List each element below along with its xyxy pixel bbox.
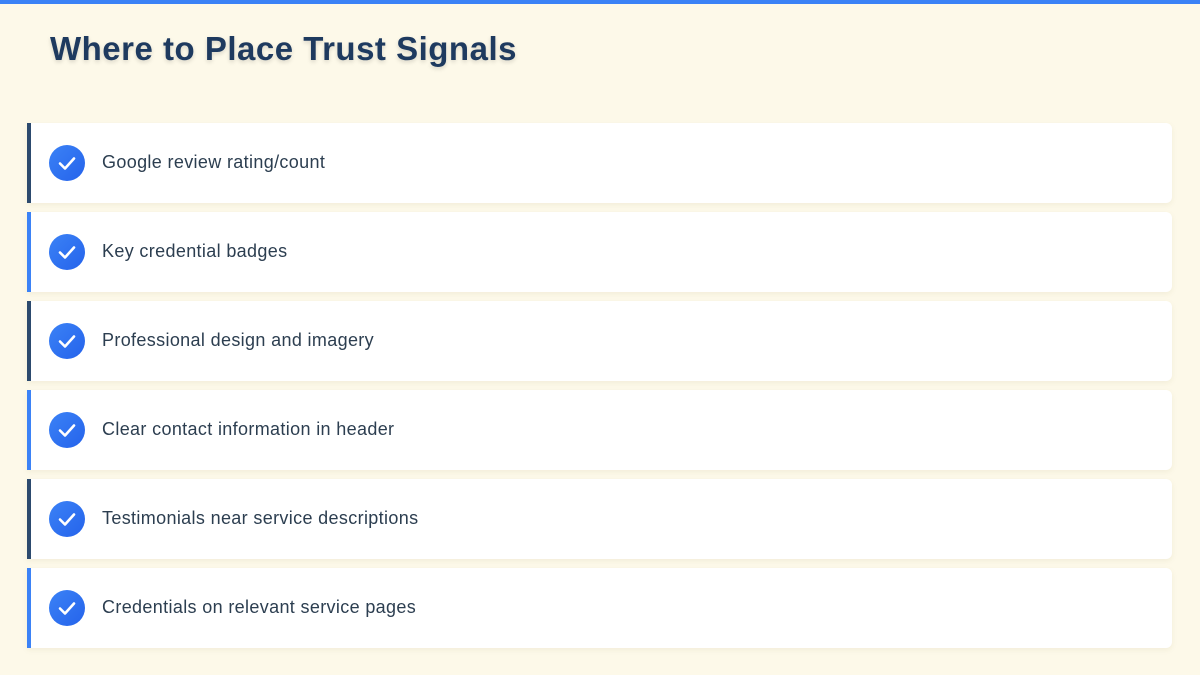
icon: check bbox=[49, 412, 85, 448]
icon: check bbox=[49, 323, 85, 359]
text: Google review rating/count bbox=[102, 152, 325, 172]
text: Key credential badges bbox=[102, 241, 287, 261]
text: Testimonials near service descriptions bbox=[102, 508, 418, 528]
title: Where to Place Trust Signals bbox=[50, 30, 517, 67]
card: design bbox=[27, 301, 1172, 381]
card: credential badges bbox=[27, 212, 1172, 292]
icon: check bbox=[49, 234, 85, 270]
card: google review bbox=[27, 123, 1172, 203]
icon: check bbox=[49, 590, 85, 626]
icon: check bbox=[49, 501, 85, 537]
card: credentials pages bbox=[27, 568, 1172, 648]
card: testimonials bbox=[27, 479, 1172, 559]
text: Clear contact information in header bbox=[102, 419, 394, 439]
text: Professional design and imagery bbox=[102, 330, 374, 350]
card: contact bbox=[27, 390, 1172, 470]
icon: check bbox=[49, 145, 85, 181]
text: Credentials on relevant service pages bbox=[102, 597, 416, 617]
